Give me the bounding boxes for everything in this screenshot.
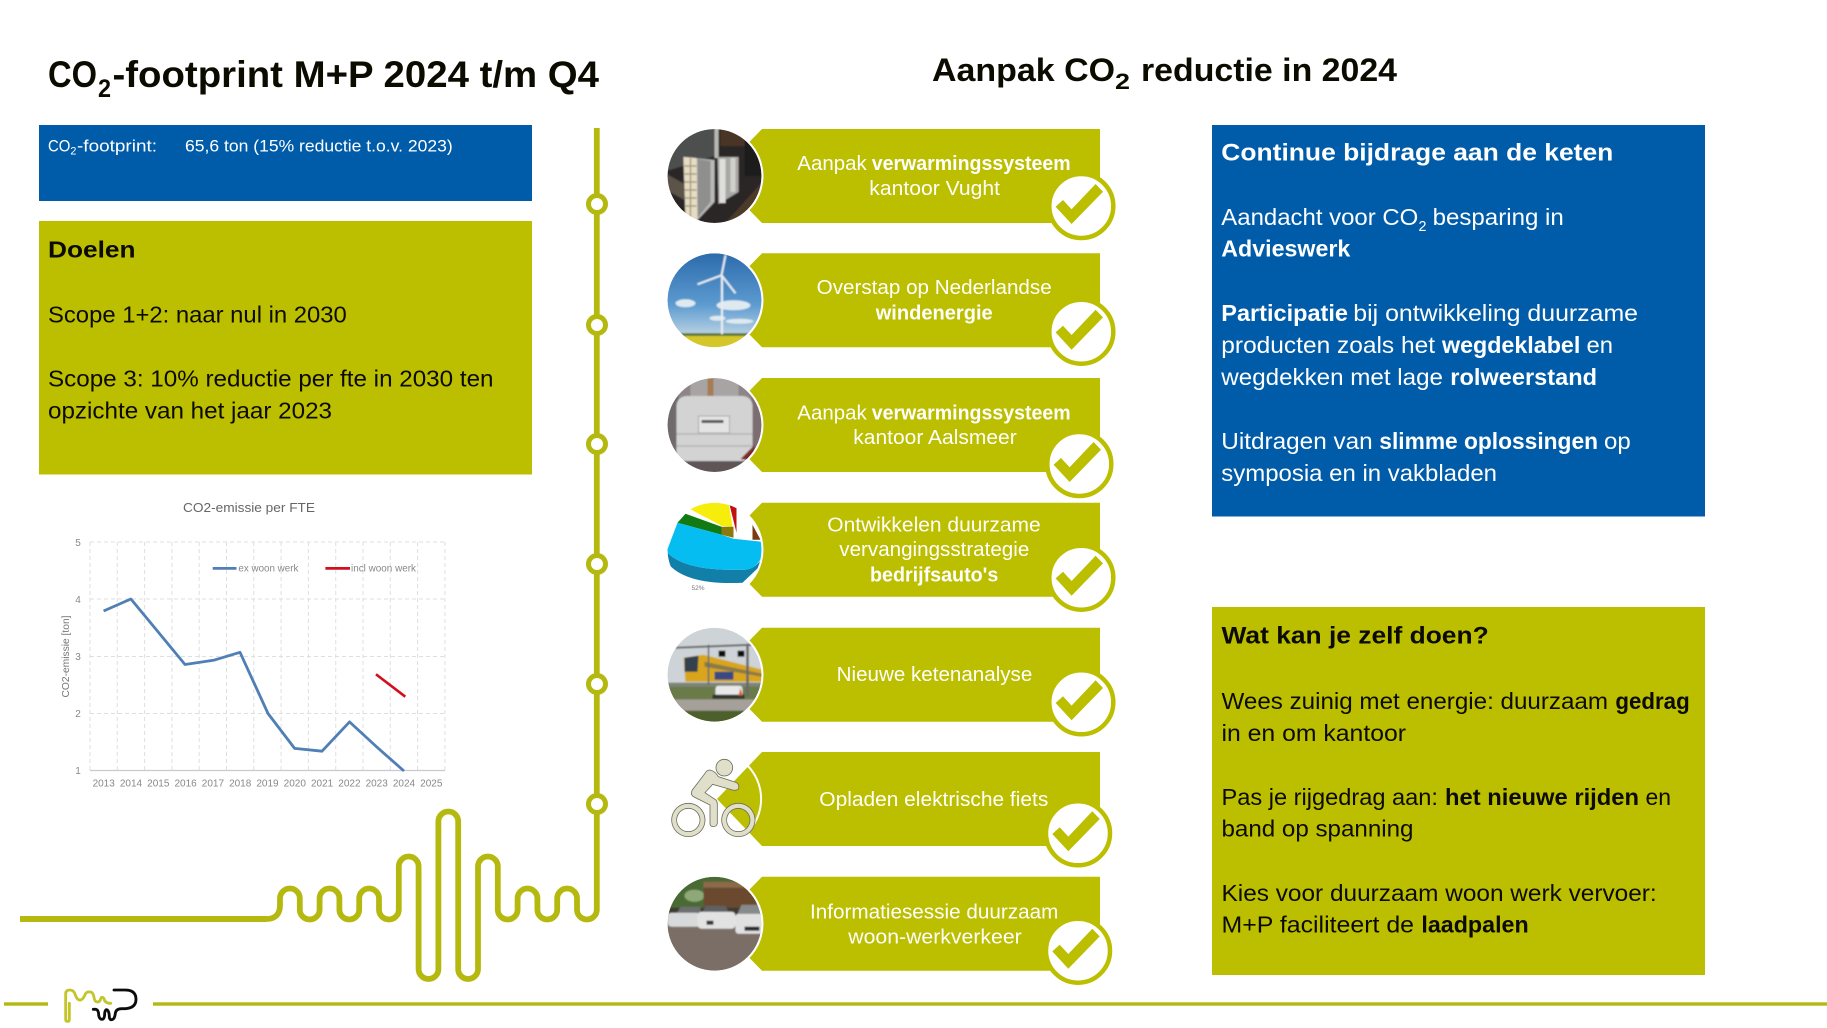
panel: CO2-footprint summary xyxy=(39,125,532,201)
label: Aanpak xyxy=(797,402,868,424)
image: 3D pie chart xyxy=(668,502,764,584)
line chart: CO2-emissie per FTE xyxy=(60,501,445,790)
title: CO2-footprint M+P 2024 t/m Q4: CO xyxy=(48,54,97,95)
icon: check xyxy=(1046,801,1110,865)
label: Informatiesessie duurzaam xyxy=(810,901,1058,923)
photo: train at crossing xyxy=(666,626,763,723)
label: Nieuwe ketenanalyse xyxy=(837,664,1032,686)
label: windenergie xyxy=(875,302,993,324)
panel: CO2-footprint summary: 2 xyxy=(70,146,76,158)
x axis labels: 2016 xyxy=(174,778,197,790)
label: kantoor Aalsmeer xyxy=(853,427,1017,449)
heading: Wat kan je zelf doen? xyxy=(1222,622,1489,649)
text: slimme oplossingen xyxy=(1221,428,1631,486)
icon: check xyxy=(1046,919,1110,983)
text: laadpalen xyxy=(1222,880,1657,938)
x axis labels: 2015 xyxy=(147,778,170,790)
y axis labels: 2 xyxy=(75,709,81,720)
text: slimme oplossingen: symposia en in vakbladen xyxy=(1221,460,1497,486)
legend xyxy=(213,564,417,575)
label xyxy=(827,515,1041,587)
timeline line with heartbeat wave xyxy=(20,128,606,979)
x axis labels: 2021 xyxy=(311,778,334,790)
x axis labels: 2019 xyxy=(256,778,279,790)
icon: check xyxy=(1049,670,1113,734)
photo: gas meter xyxy=(666,376,763,474)
photo: wind turbine xyxy=(666,252,763,349)
x axis labels: 2024 xyxy=(393,778,416,790)
text: participatie xyxy=(1220,300,1638,390)
text: gedrag: gedrag xyxy=(1615,688,1690,714)
item: woon-werkverkeer xyxy=(666,875,1110,983)
item: bedrijfsauto's: 52% xyxy=(691,585,705,592)
x axis labels: 2013 xyxy=(93,778,115,790)
y axis labels: 1 xyxy=(75,766,81,777)
text: participatie: wegdekken met lage xyxy=(1220,364,1443,390)
title: Aanpak CO2 reductie in 2024: Aanpak CO xyxy=(932,52,1115,88)
text: advieswerk xyxy=(1221,204,1564,262)
text: participatie: producten zoals het xyxy=(1221,332,1435,358)
heading: Continue bijdrage aan de keten xyxy=(1221,140,1613,167)
icon: check xyxy=(1049,546,1113,610)
text: advieswerk: Advieswerk xyxy=(1221,236,1351,262)
label: Opladen elektrische fiets xyxy=(819,789,1048,811)
chart title: CO2-emissie per FTE xyxy=(183,501,315,515)
label: Aanpak xyxy=(797,153,868,175)
text: participatie: en xyxy=(1586,332,1613,358)
item: windenergie xyxy=(666,252,1113,364)
legend: ex woon werk xyxy=(238,564,299,575)
text: slimme oplossingen: op xyxy=(1604,428,1631,454)
text: het nieuwe rijden xyxy=(1222,784,1671,842)
label: woon-werkverkeer xyxy=(847,926,1022,948)
heading: Doelen: Doelen xyxy=(48,236,136,262)
legend: incl woon werk xyxy=(351,564,417,575)
title: CO2-footprint M+P 2024 t/m Q4: -footprint M+P 2024 t/m Q4 xyxy=(112,54,599,95)
label: bedrijfsauto's xyxy=(870,565,998,587)
text: scope 3: opzichte van het jaar 2023 xyxy=(48,397,332,423)
x axis labels: 2018 xyxy=(229,778,252,790)
title: Aanpak CO2 reductie in 2024: 2 xyxy=(1115,69,1130,94)
text: laadpalen: Kies voor duurzaam woon werk vervoer: xyxy=(1222,880,1657,906)
text: scope 3: Scope 3: 10% reductie per fte in 2030 ten xyxy=(48,366,494,392)
x axis labels: 2022 xyxy=(338,778,361,790)
text: het nieuwe rijden: het nieuwe rijden xyxy=(1445,784,1639,810)
text: participatie: wegdeklabel xyxy=(1441,332,1580,358)
panel: Continue bijdrage aan de keten xyxy=(1212,125,1705,516)
text: advieswerk: Aandacht voor CO xyxy=(1221,204,1418,230)
text: advieswerk: besparing in xyxy=(1433,204,1564,230)
text: slimme oplossingen: slimme oplossingen xyxy=(1379,428,1598,454)
series: ex woon werk xyxy=(104,599,404,771)
y axis labels: 3 xyxy=(75,652,81,663)
x axis labels: 2017 xyxy=(202,778,224,790)
label xyxy=(797,402,1071,449)
x axis labels: 2023 xyxy=(366,778,388,790)
text: gedrag: in en om kantoor xyxy=(1222,720,1406,746)
panel: Wat kan je zelf doen? xyxy=(1212,607,1705,975)
text: laadpalen: laadpalen xyxy=(1421,912,1529,938)
label: verwarmingssysteem xyxy=(872,153,1071,175)
text: participatie: Participatie xyxy=(1221,300,1348,326)
item: elektrische fiets xyxy=(672,752,1110,865)
label: Overstap op Nederlandse xyxy=(817,277,1052,299)
panel: CO2-footprint summary: -footprint: xyxy=(77,136,157,156)
text: het nieuwe rijden: band op spanning xyxy=(1222,816,1414,842)
icon: check xyxy=(1049,300,1113,364)
panel: CO2-footprint summary: 65,6 ton (15% reductie t.o.v. 2023) xyxy=(185,136,453,156)
y axis labels xyxy=(75,538,81,777)
item: bedrijfsauto's xyxy=(666,501,1113,610)
y axis labels: 5 xyxy=(75,538,81,549)
label xyxy=(817,277,1052,324)
text: slimme oplossingen: Uitdragen van xyxy=(1221,428,1373,454)
text: scope 1+2: Scope 1+2: naar nul in 2030 xyxy=(48,302,347,328)
y axis labels: 4 xyxy=(75,595,81,606)
logo: M+P xyxy=(66,990,136,1021)
panel: Doelen xyxy=(39,221,532,474)
series: incl woon werk xyxy=(376,674,405,697)
x axis labels: 2025 xyxy=(420,778,443,790)
label xyxy=(797,153,1071,200)
icon: check xyxy=(1047,432,1111,496)
text: gedrag: Wees zuinig met energie: duurzaam xyxy=(1222,688,1608,714)
icon: check xyxy=(1049,174,1113,238)
x axis labels: 2020 xyxy=(284,778,306,790)
label: verwarmingssysteem xyxy=(872,402,1071,424)
photo: electric cars xyxy=(666,875,763,972)
text: scope 3 xyxy=(48,366,494,423)
footer rule xyxy=(4,1002,1827,1006)
label xyxy=(810,901,1058,948)
item: verwarmingssysteem Vught xyxy=(666,128,1113,238)
text: participatie: bij ontwikkeling duurzame xyxy=(1353,300,1638,326)
text: het nieuwe rijden: en xyxy=(1646,784,1671,810)
text: participatie: rolweerstand xyxy=(1450,364,1597,390)
x axis labels xyxy=(93,778,443,790)
icon: cyclist xyxy=(672,759,755,837)
title: CO2-footprint M+P 2024 t/m Q4: 2 xyxy=(98,75,111,103)
label: kantoor Vught xyxy=(869,178,1000,200)
photo: outdoor heat pump units xyxy=(666,128,763,224)
item: verwarmingssysteem Aalsmeer xyxy=(666,376,1111,496)
x axis labels: 2014 xyxy=(120,778,143,790)
item: nieuwe ketenanalyse xyxy=(666,626,1113,734)
text: gedrag xyxy=(1222,688,1690,746)
y axis title: CO2-emissie [ton] xyxy=(60,615,72,698)
label: Ontwikkelen duurzame xyxy=(827,515,1041,537)
text: het nieuwe rijden: Pas je rijgedrag aan: xyxy=(1222,784,1438,810)
text: advieswerk: 2 xyxy=(1418,218,1426,235)
label: vervangingsstrategie xyxy=(839,539,1029,561)
text: laadpalen: M+P faciliteert de xyxy=(1222,912,1414,938)
title: Aanpak CO2 reductie in 2024: reductie in 2024 xyxy=(1141,52,1397,88)
title: Aanpak CO2 reductie in 2024 xyxy=(932,52,1397,94)
panel: CO2-footprint summary: CO xyxy=(48,136,70,156)
